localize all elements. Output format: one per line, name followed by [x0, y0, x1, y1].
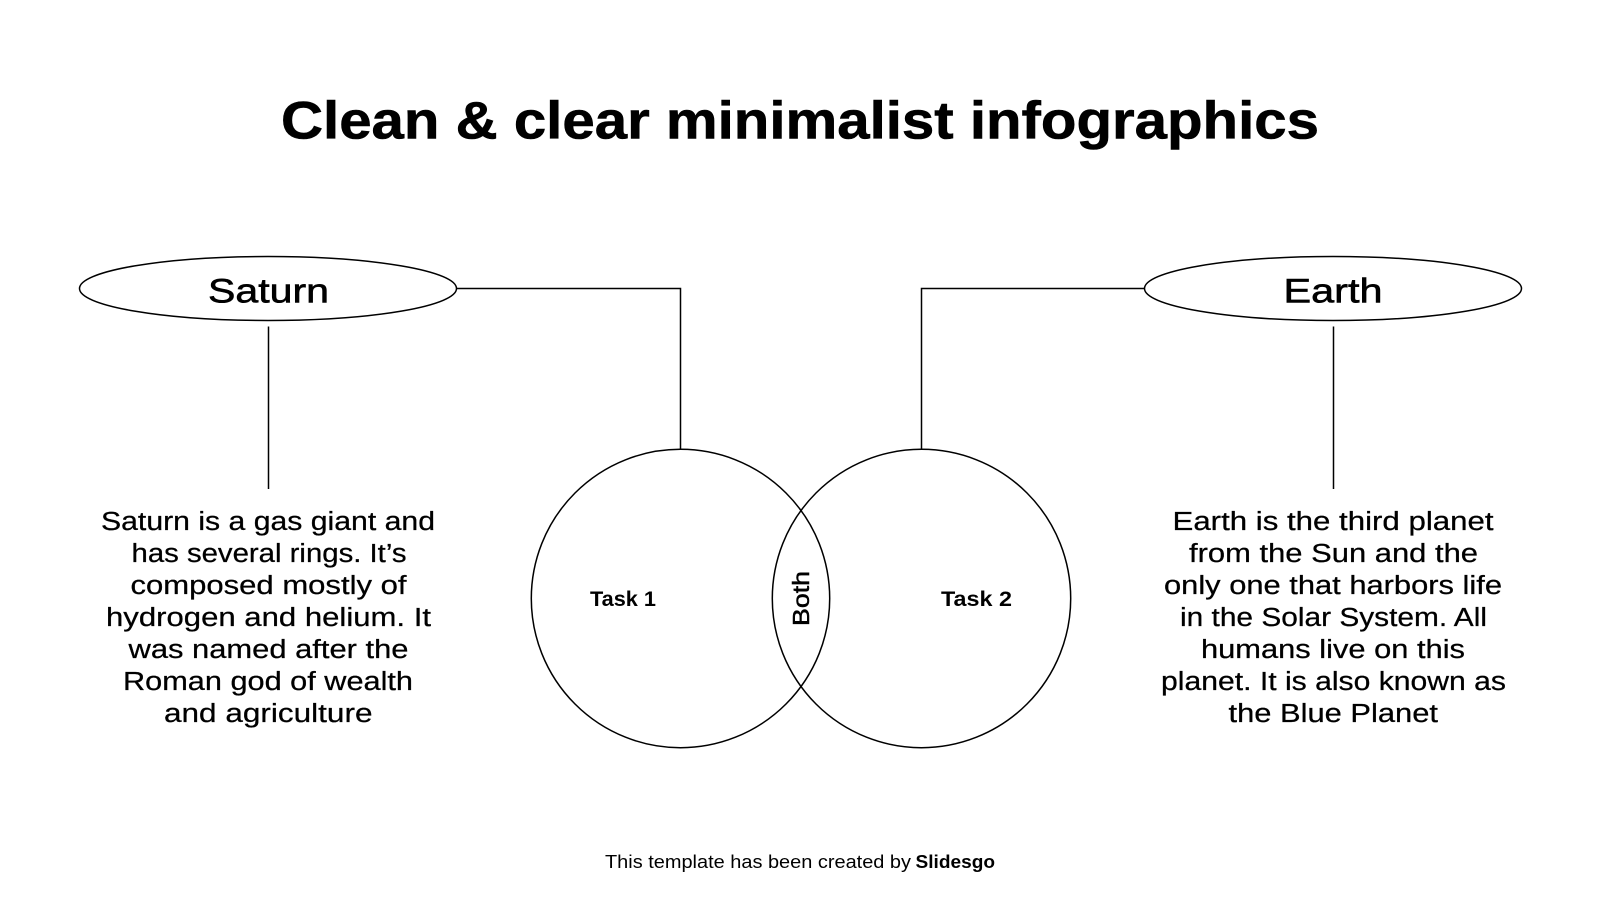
line from Saturn label to description [268, 326, 270, 489]
Earth description: humans live on this [1201, 636, 1465, 664]
Earth label ellipse: Earth [1284, 272, 1382, 310]
label: Task 1: Task 1 [590, 587, 656, 611]
Earth description: planet. It is also known as [1161, 668, 1506, 696]
Saturn description: was named after the [127, 636, 409, 664]
circle: Task 1 [531, 449, 830, 748]
Earth description [1161, 508, 1506, 728]
label: Task 2: Task 2 [941, 587, 1012, 611]
footer credit: Slidesgo [916, 852, 995, 872]
title: Clean & clear minimalist infographics [281, 92, 1319, 150]
line from Earth label to description [1332, 326, 1334, 489]
panel: Saturn [80, 256, 456, 728]
footer credit: This template has been created by [605, 852, 911, 872]
Saturn description: Roman god of wealth [123, 668, 413, 696]
Earth description: from the Sun and the [1189, 540, 1478, 568]
connector: Earth to Task 2 circle [922, 288, 1144, 449]
Saturn description: Saturn is a gas giant and [101, 508, 435, 536]
Earth description: only one that harbors life [1164, 572, 1502, 600]
Earth description: Earth is the third planet [1172, 508, 1494, 536]
label: Both: Both [788, 571, 814, 626]
Earth description: in the Solar System. All [1180, 604, 1487, 632]
Saturn description: composed mostly of [130, 572, 408, 600]
Saturn description [101, 508, 435, 728]
Saturn description: hydrogen and helium. It [106, 604, 431, 632]
Saturn description: has several rings. It’s [132, 540, 406, 568]
Earth label ellipse [1144, 256, 1522, 320]
circle: Task 2 [772, 449, 1071, 748]
connector: Saturn to Task 1 circle [457, 288, 680, 449]
Earth description: the Blue Planet [1228, 700, 1438, 728]
venn diagram [531, 449, 1071, 748]
panel: Earth [1144, 256, 1522, 728]
Saturn description: and agriculture [164, 700, 372, 728]
Saturn label ellipse: Saturn [208, 272, 329, 310]
Saturn label ellipse [80, 256, 456, 320]
